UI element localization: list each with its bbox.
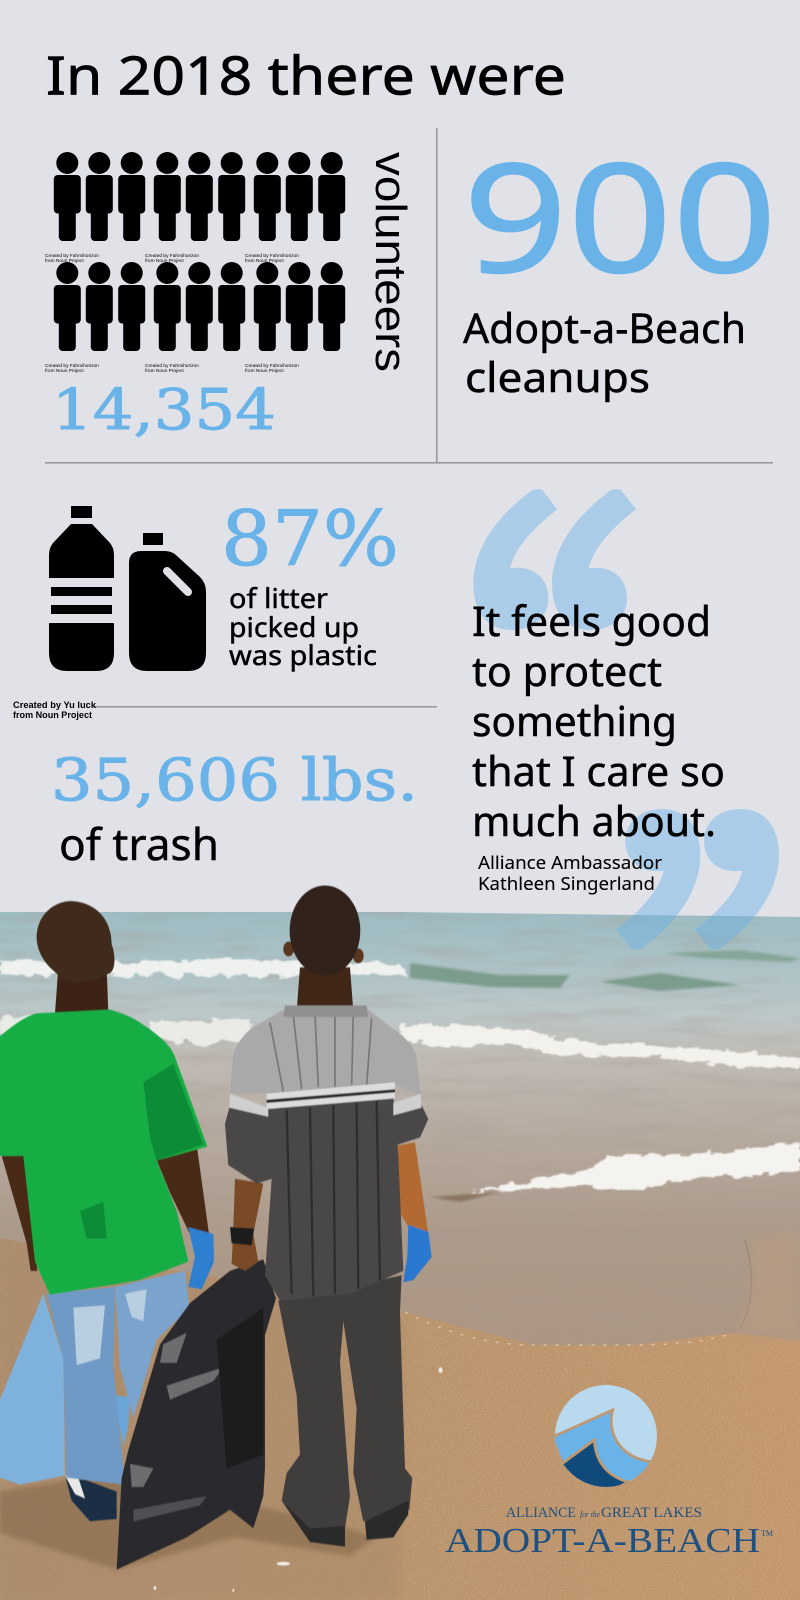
quote attribution: Kathleen Singerland: [478, 872, 655, 896]
panel: volunteers: [45, 152, 415, 443]
plastic label: [229, 579, 377, 673]
panel: quote: [472, 489, 779, 950]
icon credit: from Noun Project: [13, 710, 93, 721]
quote text: much about.: [472, 793, 716, 849]
icon credits: [45, 253, 299, 374]
logo line: alliance: GREAT LAKES: [601, 1505, 702, 1521]
volunteers number: 14,354: [52, 378, 276, 443]
icon credits: from Noun Project: [145, 368, 184, 374]
icon credits: Created by Fahmihorizon: [245, 253, 299, 259]
quote text: that I care so: [472, 743, 725, 799]
icon: people rows: [54, 152, 345, 351]
black trash bag: [117, 1259, 276, 1570]
panel: plastic: [13, 494, 399, 721]
quote attribution: [478, 851, 663, 896]
logo line: alliance: ALLIANCE: [506, 1505, 576, 1521]
icon credits: from Noun Project: [245, 368, 284, 374]
cleanups number: 900: [463, 112, 777, 317]
icon credits: from Noun Project: [145, 258, 184, 264]
icon credits: from Noun Project: [45, 368, 84, 374]
dividers: [45, 128, 773, 708]
icon credits: Created by Fahmihorizon: [245, 363, 299, 369]
photo: two boys holding trash bags: [0, 886, 443, 1592]
icon credits: from Noun Project: [45, 258, 84, 264]
logo line: adopt-a-beach: TM: [761, 1529, 773, 1538]
icon credits: Created by Fahmihorizon: [45, 253, 99, 259]
volunteers label: volunteers: [366, 152, 415, 372]
left boy: [0, 901, 214, 1521]
plastic number: 87%: [221, 494, 399, 583]
icon credits: Created by Fahmihorizon: [45, 363, 99, 369]
icon: closing quote mark: [616, 809, 779, 950]
logo line: alliance: for the: [580, 1510, 600, 1519]
icon: wave emblem: [555, 1385, 657, 1487]
icon credits: Created by Fahmihorizon: [145, 253, 199, 259]
quote text: [472, 593, 725, 849]
quote text: to protect: [472, 643, 662, 699]
icon: opening quote mark: [473, 489, 636, 630]
cleanups label: cleanups: [465, 349, 650, 405]
icon credit: [13, 700, 97, 721]
trash label: of trash: [59, 813, 219, 873]
icon: bottle: [49, 506, 114, 671]
right boy: [225, 886, 432, 1547]
logo: [445, 1383, 773, 1560]
icon credits: Created by Fahmihorizon: [145, 363, 199, 369]
plastic label: of litter: [229, 579, 328, 616]
icon credit: Created by Yu luck: [13, 700, 97, 711]
trash number: 35,606 lbs.: [51, 746, 418, 814]
icon credits: from Noun Project: [245, 258, 284, 264]
background photo: beach and water: [0, 912, 800, 1600]
logo line: alliance: [506, 1505, 702, 1521]
cleanups label: Adopt-a-Beach: [463, 300, 746, 356]
cleanups label: [463, 300, 746, 405]
plastic label: picked up: [229, 608, 359, 645]
title: In 2018 there were: [46, 38, 566, 110]
quote attribution: Alliance Ambassador: [478, 851, 663, 875]
panel: cleanups: [463, 112, 777, 405]
quote text: something: [472, 693, 677, 749]
shells: [154, 1367, 443, 1592]
logo line: adopt-a-beach: ADOPT-A-BEACH: [445, 1521, 760, 1560]
panel: trash: [51, 746, 418, 873]
plastic label: was plastic: [229, 636, 377, 673]
icon: jug: [129, 533, 206, 671]
quote text: It feels good: [472, 593, 711, 649]
